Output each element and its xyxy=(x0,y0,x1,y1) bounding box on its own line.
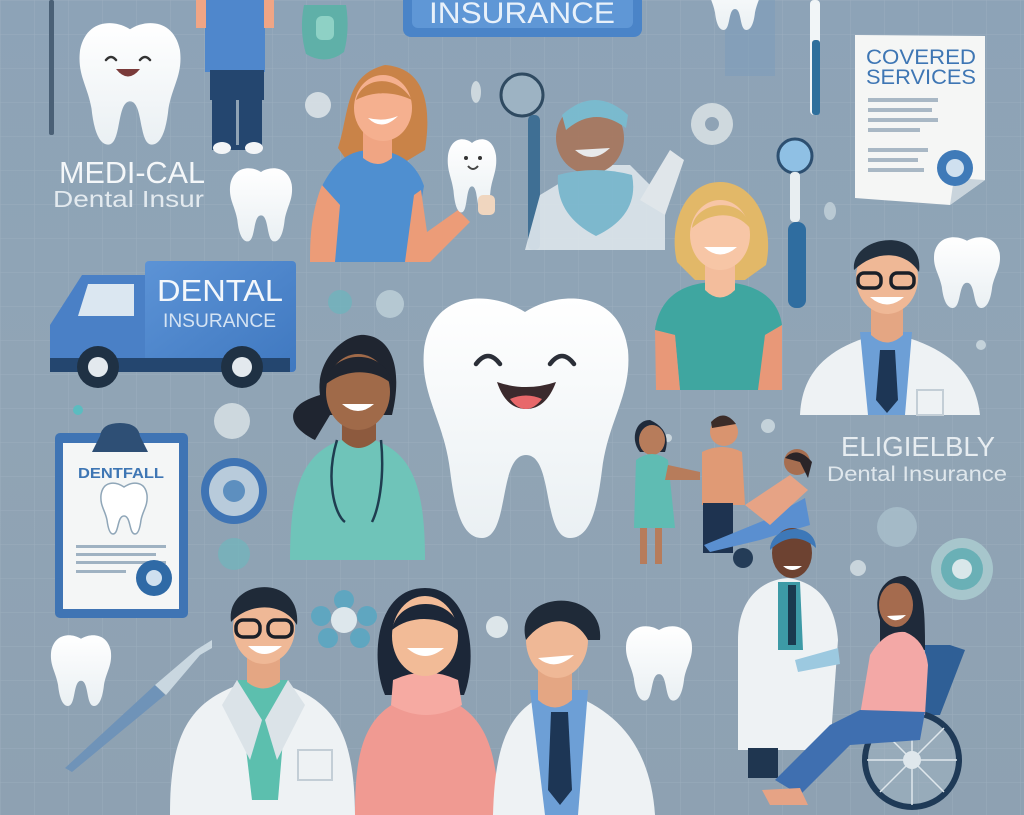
faded blue square xyxy=(725,0,775,76)
right male doctor xyxy=(493,601,655,815)
delivery truck: dental insurance: INSURANCE xyxy=(163,311,276,332)
round teal badge xyxy=(931,538,993,600)
clipboard: dental form xyxy=(55,423,188,618)
thin dental probe far left xyxy=(49,0,54,135)
glass bubble xyxy=(877,507,917,547)
bottom left tooth xyxy=(51,635,111,706)
dental mirror xyxy=(501,74,543,250)
delivery truck: dental insurance xyxy=(50,261,296,388)
tooth mascot top left xyxy=(80,23,180,145)
woman in wheelchair xyxy=(762,576,965,807)
tooth lower centre right xyxy=(626,626,692,701)
small floating details top xyxy=(305,81,986,576)
woman in teal scrubs xyxy=(290,335,425,560)
floating decorative dots centre left xyxy=(73,290,404,570)
document: covered services xyxy=(855,35,985,205)
dental scaler tool xyxy=(65,640,212,772)
document: covered services: COVERED xyxy=(866,46,976,69)
tooth top centre xyxy=(709,0,761,30)
mouthwash bottle xyxy=(302,5,348,60)
round tooth badge xyxy=(201,458,267,524)
blonde woman xyxy=(655,182,782,390)
small white flower xyxy=(486,616,508,638)
heading: Medi-Cal dental insurance: Dental Insur xyxy=(53,186,204,212)
insurance banner xyxy=(403,0,642,37)
central smiling tooth xyxy=(424,299,628,538)
heading: Medi-Cal dental insurance: MEDI-CAL xyxy=(59,155,205,190)
heading: eligibility dental insurance xyxy=(827,431,1007,486)
heading: eligibility dental insurance: ELIGIELBLY xyxy=(841,431,995,462)
floral gear top centre xyxy=(691,103,733,145)
woman holding tooth xyxy=(310,65,470,262)
toothbrush top right xyxy=(810,0,820,115)
delivery truck: dental insurance: DENTAL xyxy=(157,273,283,308)
small tooth xyxy=(230,168,292,241)
document: covered services: SERVICES xyxy=(866,66,976,89)
dental mirror right xyxy=(778,139,812,308)
heading: Medi-Cal dental insurance xyxy=(53,155,205,212)
left doctor with glasses xyxy=(170,587,355,815)
figure with blue cap and surgical collar xyxy=(525,100,684,250)
tooth right xyxy=(934,237,1000,308)
family and child at dental chair xyxy=(634,415,812,568)
person in blue apron top xyxy=(196,0,274,154)
teal flower xyxy=(311,590,377,648)
dentist in white coat xyxy=(738,528,840,778)
doctor with glasses right xyxy=(800,240,980,415)
woman in pink sweater xyxy=(355,588,499,815)
tooth held by woman xyxy=(448,139,496,215)
heading: eligibility dental insurance: Dental Insurance xyxy=(827,463,1007,486)
clipboard: dental form: DENTFALL xyxy=(78,465,164,482)
